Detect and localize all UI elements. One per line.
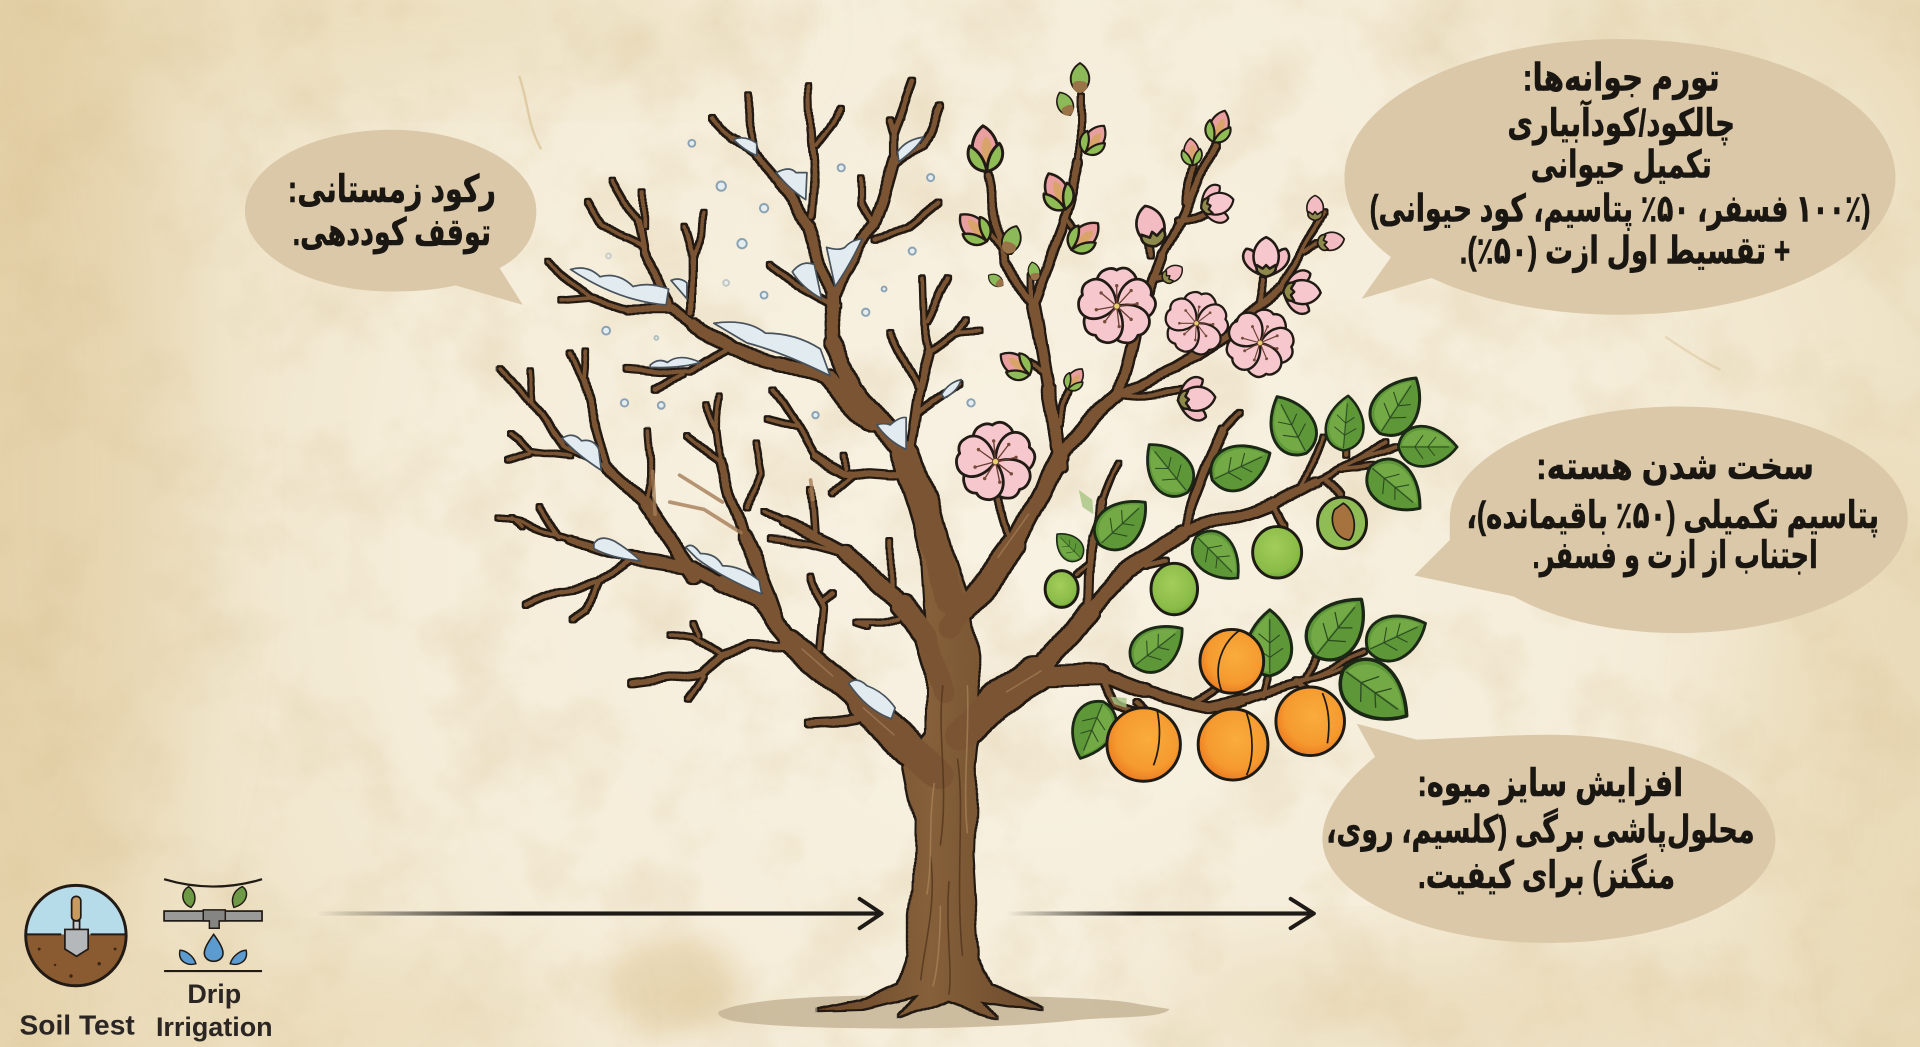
center branch [743,539,779,625]
text: fruit sizing: منگنز) برای کیفیت. [1418,853,1675,897]
fruit with hardened pit [1318,497,1367,549]
text: bud swell: تکمیل حیوانی [1531,145,1712,187]
label: soil test: Soil Test [20,1010,135,1041]
fruit limbs [962,410,1396,735]
text: winter [288,169,496,254]
speech bubble: winter dormancy [245,130,536,305]
arrow: toward trunk [316,899,882,928]
text: fruit sizing: محلول‌پاشی برگی (کلسیم، روی، [1326,807,1755,852]
ground shadow under tree [718,995,1169,1028]
tree: trunk and branches [495,82,1396,1019]
big left limb [830,380,872,422]
text: bud swell: (۱۰۰٪ فسفر، ۵۰٪ پتاسیم، کود حیوانی) [1370,189,1870,232]
text: bud swell: چالکود/کودآبیاری [1507,99,1735,145]
right-hand sub limb on upper limb [909,353,929,459]
label: drip irrigation: Irrigation [156,1012,273,1042]
label: drip irrigation: Drip [187,979,241,1009]
text: bud swell [1370,58,1870,272]
falling snow dots [602,140,975,418]
trunk [817,527,1042,1019]
trunk bark texture [802,514,1041,994]
speech bubble: pit hardening [1414,407,1908,633]
arrow: after trunk [1007,899,1314,928]
second left limb [902,606,943,692]
icon: soil test [24,884,127,987]
spring: open blossoms [949,268,1308,509]
text: pit hardening: سخت شدن هسته: [1536,446,1814,488]
text: winter: رکود زمستانی: [288,169,496,211]
text: bud swell: + تقسیط اول ازت (۵۰٪). [1460,230,1790,272]
speech bubble: bud swell [1344,39,1896,315]
snow on winter branches [562,137,961,719]
summer: green fruits [1045,497,1367,615]
upper-left limb [647,503,696,576]
text: winter: توقف کوددهی. [293,212,491,254]
text: fruit sizing: افزایش سایز میوه: [1417,763,1683,805]
spring: buds [950,63,1346,422]
text: pit hardening [1466,446,1879,577]
winter branches, main upper limb [546,82,980,600]
icon: drip irrigation [164,879,262,971]
winter branches, left side [495,353,943,774]
summer: leaves [1048,365,1457,767]
summer: ripe apricots [1107,629,1344,781]
text: bud swell: تورم جوانه‌ها: [1523,58,1720,101]
speech bubble: fruit sizing [1322,724,1776,943]
text: fruit sizing [1326,763,1755,897]
faded unfinished twigs [653,471,813,533]
blossom limb [949,96,1326,627]
